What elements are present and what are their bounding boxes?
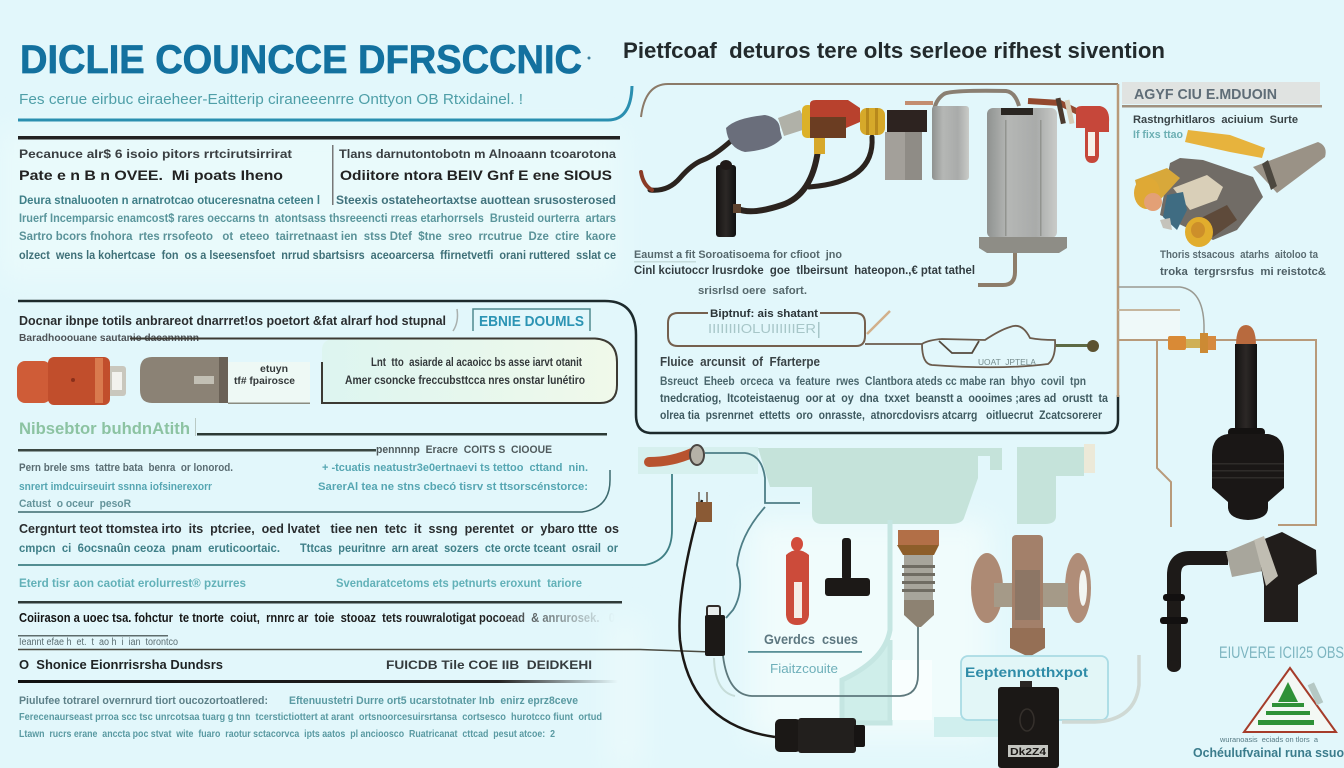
sidebar text: If fixs ttao <box>1133 129 1183 141</box>
teal connector line <box>18 470 672 565</box>
callout box: Amer csoncke freccubsttcca nres onstar lunétiro <box>345 373 585 387</box>
callout box: Lnt tto asiarde al acaoicc bs asse iarvt otanit <box>371 355 582 369</box>
icon: large filter cylinder <box>978 108 1067 285</box>
bracket <box>453 309 458 331</box>
icon: square switch <box>885 110 927 180</box>
left notes: Pern brele sms tattre bata benra or lonorod. <box>19 462 233 474</box>
illustration caption: srisrlsd oere safort. <box>698 285 807 297</box>
illustration caption: Eaumst a fit Soroatisoema for cfioot jno <box>634 249 842 261</box>
left column subheading: Pate e n B n OVEE. Mi poats Iheno <box>19 167 283 183</box>
rule <box>18 680 618 683</box>
column divider <box>332 145 334 205</box>
bold heading: O Shonice Eionrrisrsha Dundsrs <box>19 657 223 672</box>
rule <box>18 601 622 604</box>
left notes: Catust o oceur pesoR <box>19 498 131 510</box>
right heading: Pietfcoaf deturos tere olts serleoe rifhest sivention <box>623 38 1165 63</box>
body paragraph: olzect wens la kohertcase fon os a lseesensfoet nrrud sbartsisrs aceoarcersa ffirnetvetfi orani ruttered sslat ce <box>19 248 616 262</box>
text block: fluice: olrea tia psrenrnet ettetts oro onrasste, atnorcdovisrs atcarrg oitluecrut Zcatcsorerer <box>660 410 1102 422</box>
sidebar caption: troka tergrsrsfus mi reistotc& <box>1160 266 1326 278</box>
callout box <box>130 338 617 403</box>
left notes: snrert imdcuirseuirt ssnna iofsinerexorr <box>19 481 213 493</box>
connector line: teal <box>705 453 800 618</box>
title: DICLIE COUNCCE DFRSCCNIC <box>20 38 582 82</box>
panel frame divider <box>1117 84 1119 397</box>
icon: black small plug <box>705 606 725 656</box>
icon: gray connector: tf# fpairosce <box>234 376 295 387</box>
footer paragraph: Eftenuustetri Durre ort5 ucarstotnater Inb enirz eprz8ceve <box>289 695 578 707</box>
icon: multi-core connector <box>1134 130 1326 247</box>
icon: gray cylinder <box>905 91 1019 180</box>
footer paragraph: Ferecenaurseast prroa scc tsc unrcotsaa tuarg g tnn tcerstictiottert at arant ortsnoorcesuirsrtansa cortsesco hurotcco fiunt ortud <box>19 711 602 723</box>
label box: biptnuf <box>668 308 865 346</box>
text block: fluice: Fluice arcunsit of Ffarterpe <box>660 354 820 369</box>
cloud shape diagram: UOAT JPTELA <box>978 358 1037 367</box>
bold text: Cergnturt teot ttomstea irto its ptcriee, oed lvatet tiee nen tetc it ssng perentet or ybaro ttte os <box>19 521 619 536</box>
sidebar text: Rastngrhitlaros aciuium Surte <box>1133 114 1298 126</box>
teal text: Svendaratcetoms ets petnurts eroxunt tariore <box>336 576 582 590</box>
body paragraph: Sartro bcors fnohora rtes rrsofeoto ot eteeo tairretnaast ien stss Dtef $tne sreo rrcutrue Dze ctire kaore <box>19 229 616 243</box>
text: fiaitzcouite: Fiaitzcouite <box>770 661 838 676</box>
icon: gray coupling <box>726 110 809 152</box>
text block: fluice: Bsreuct Eheeb orceca va feature rwes Clantbora ateds cc mabe ran bhyo covil tpn <box>660 376 1086 388</box>
panel: notes section <box>18 418 610 512</box>
icon: black control box <box>998 681 1059 768</box>
icon: brass valve <box>971 535 1091 657</box>
text block: fluice <box>660 354 1109 422</box>
right connector lines <box>1118 287 1316 527</box>
right notes: SarerAl tea ne stns cbecó tisrv st ttsorscénstorce: <box>318 481 588 493</box>
icon: warning triangle <box>1244 668 1336 732</box>
icon: orange connector <box>17 357 126 405</box>
body paragraph: Iruerf Incemparsic enamcost$ rares oeccarns tn atontsass thsreeencti rreas etarhorrsels Brusteid ourterra artars <box>19 211 616 225</box>
icon: black t-handle <box>825 538 870 596</box>
panel: connector comparison <box>17 309 617 405</box>
footer paragraph <box>19 695 602 740</box>
sidebar heading <box>1122 82 1322 108</box>
bold heading: FUICDB Tile COE IIB DEIDKEHI <box>386 658 592 672</box>
caption: Baradhooouane sautanie dacannnnn <box>19 333 199 344</box>
panel: details text <box>18 470 712 740</box>
underline <box>748 651 862 653</box>
bracket line <box>18 470 610 512</box>
icon: angled black sensor <box>1160 532 1317 672</box>
notes heading: pennnnp Eracre COITS S CIOOUE <box>376 444 552 456</box>
label box: biptnuf: Biptnuf: ais shatant <box>710 308 818 320</box>
right column subheading: Odiitore ntora BEIV Gnf E ene SIOUS <box>340 167 612 183</box>
body paragraph <box>19 193 616 262</box>
long rule <box>18 650 712 652</box>
text: gverdcs: Gverdcs csues <box>764 631 858 647</box>
section frame <box>18 301 1118 433</box>
section heading: Docnar ibnpe totils anbrareot dnarrret!os poetort &fat alrarf hod stupnal <box>19 313 446 328</box>
icon: copper elbow <box>649 445 704 465</box>
pale band behind elbow <box>638 447 758 474</box>
caption rule <box>634 261 696 262</box>
sidebar <box>1122 82 1326 278</box>
illustration caption: Cinl kciutoccr lrusrdoke goe tlbeirsunt hateopon.,€ ptat tathel <box>634 263 975 277</box>
icon: black inline connector <box>775 718 865 753</box>
header underline <box>18 86 632 120</box>
panel frame top line <box>641 84 1118 117</box>
icon: gray connector: etuyn <box>260 364 288 375</box>
sidebar heading: AGYF CIU E.MDUOIN <box>1134 86 1277 103</box>
icon: black control box: Dk2Z4 <box>1010 747 1047 758</box>
black hoses <box>641 137 872 211</box>
faint lower shapes <box>842 520 1004 737</box>
illustration caption <box>634 249 975 297</box>
right column heading: Tlans darnutontobotn m Alnoaann tcoarotona <box>339 147 616 161</box>
icon: gray connector <box>140 357 310 404</box>
cloud shape diagram <box>865 326 1099 367</box>
body paragraph: Steexis ostateheortaxtse auottean srusosterosed <box>336 193 616 207</box>
small caption: wuranoasis eciads on tlors a <box>1219 735 1319 744</box>
illustration: hose assembly <box>641 91 1109 285</box>
icon: black sensor probe <box>1212 325 1284 520</box>
icon: black plug <box>716 160 741 237</box>
right notes: + -tcuatis neatustr3e0ertnaevi ts tettoo cttand nin. <box>322 462 588 474</box>
icon: small brown tag <box>696 492 712 522</box>
footer paragraph: Piulufee totrarel overnrurd tiort oucozortoatlered: <box>19 695 268 707</box>
sidebar caption: Thoris stsacous atarhs aitoloo ta <box>1160 249 1319 261</box>
bold line: Coiirason a uoec tsa. fohctur te tnorte coiut, rnnrc ar toie stooaz tets rouwralotigat pocoead & anrurosek. 0 <box>19 610 615 625</box>
label box: EBNIE DOUMLS <box>479 313 584 330</box>
icon: red probe <box>786 537 809 625</box>
connector line: gray tray <box>714 625 918 696</box>
icon: red valve <box>1028 98 1109 163</box>
short rule <box>18 635 168 636</box>
pale green background shape <box>758 444 1095 524</box>
label box: eeptennot: Eeptennotthxpot <box>965 664 1088 680</box>
left column heading: Pecanuce aIr$ 6 isoio pitors rrtcirutsirrirat <box>19 147 292 161</box>
pale curve <box>1062 655 1139 722</box>
icon: bolt and spring <box>897 530 939 627</box>
text block: fluice: tnedcratiog, Itcoteistaenug oor at oy dna txxet beanstt a oooimes ;ares ad orustt ta <box>660 393 1109 405</box>
background glow <box>0 130 990 768</box>
connector line: black cable <box>679 500 775 737</box>
tick mark <box>867 311 890 334</box>
label box: eeptennot <box>961 656 1108 720</box>
icon: red fitting block <box>802 100 885 154</box>
panel: intro text columns <box>19 145 616 262</box>
label box: biptnuf: IIIIIIIIOLUIIIIIIER <box>708 321 816 336</box>
teal text: Eterd tisr aon caotiat erolurrest® pzurres <box>19 576 246 590</box>
green heading: Nibsebtor buhdnAtith <box>19 419 190 438</box>
footer paragraph: Ltawn rucrs erane anccta poc stvat wite fuaro raotur sctacorvca ipts aatos pl ancioosco Ruatricanat cttcad pesut atcoe: 2 <box>19 728 555 740</box>
paragraph line: cmpcn ci 6ocsnaûn ceoza pnam eruticoortaic. <box>19 541 280 555</box>
left notes <box>19 462 233 510</box>
icon: orange fitting <box>1168 333 1216 353</box>
right notes <box>318 462 588 493</box>
heading rule <box>18 136 620 140</box>
small text: Ieannt efae h et. t ao h i ian torontco <box>19 637 178 648</box>
subtitle: Fes cerue eirbuc eiraeheer-Eaitterip ciraneeenrre Onttyon OB Rtxidainel. ! <box>19 91 523 108</box>
paragraph line: Tttcas peuritnre arn areat sozers cte orcte tceant osrail or <box>300 541 618 555</box>
body paragraph: Deura stnaluooten n arnatrotcao otuceresnatna ceteen l <box>19 193 320 207</box>
